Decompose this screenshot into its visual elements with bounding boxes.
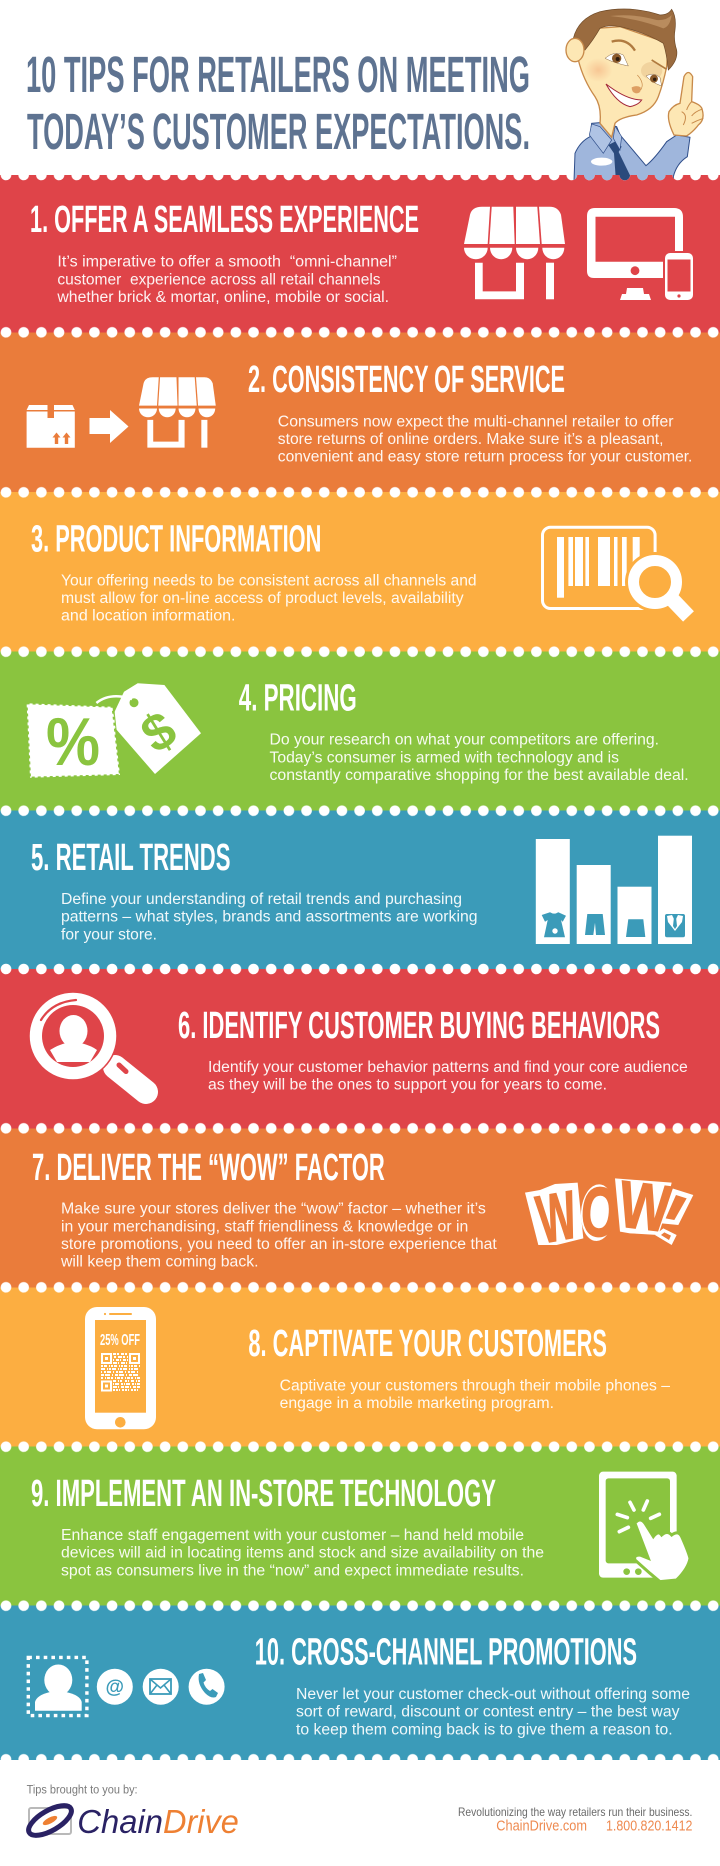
panel: tip 10 <box>0 1606 720 1760</box>
icon: tablet with tapping hand <box>599 1472 690 1582</box>
body 8: Captivate your customers through their mobile phones – <box>280 1377 671 1394</box>
body 2: Consumers now expect the multi-channel retailer to offer <box>278 413 674 430</box>
panel: tip 4 <box>0 652 720 810</box>
QR code <box>101 1354 140 1390</box>
body 1 <box>56 254 397 306</box>
coupon text: 25% OFF <box>100 1332 140 1349</box>
body 2: store returns of online orders. Make sure it’s a pleasant, <box>278 431 664 448</box>
footer <box>24 1782 692 1841</box>
body 4: Do your research on what your competitors are offering. <box>270 732 659 749</box>
icon: dress <box>542 912 566 937</box>
icon: shorts <box>585 914 605 935</box>
body 8 <box>280 1377 671 1412</box>
icon: price tag <box>96 683 201 774</box>
icon: envelope <box>143 1669 179 1705</box>
icon: storefront <box>139 377 216 448</box>
hair <box>573 9 677 70</box>
body 6: as they will be the ones to support you for years to come. <box>208 1077 607 1094</box>
icon: storefront <box>464 207 565 299</box>
body 5: Define your understanding of retail trends and purchasing <box>61 891 462 908</box>
panel: tip 7 <box>0 1128 720 1288</box>
collar <box>589 124 622 153</box>
icon: email at <box>97 1669 133 1705</box>
heading 7: 7. DELIVER THE “WOW” FACTOR <box>32 1147 385 1189</box>
icon: WOW burst: W <box>531 1176 583 1258</box>
credit line: Tips brought to you by: <box>27 1782 138 1796</box>
body 9: Enhance staff engagement with your customer – hand held mobile <box>61 1527 524 1544</box>
icon: monitor and phone <box>587 208 695 302</box>
eyes <box>605 53 628 66</box>
body 4: Today’s consumer is armed with technology and is <box>270 749 619 766</box>
icon: WOW burst: O <box>578 1172 621 1252</box>
website: ChainDrive.com <box>496 1819 587 1835</box>
icon: WOW burst: W <box>615 1166 675 1246</box>
panel: tip 8 <box>0 1288 720 1446</box>
body 2 <box>278 413 692 466</box>
body 10 <box>296 1686 690 1738</box>
logo: ChainDrive: Chain <box>77 1803 163 1840</box>
panel: tip 6 <box>0 969 720 1129</box>
body 4: constantly comparative shopping for the best available deal. <box>270 767 689 784</box>
heading 4: 4. PRICING <box>239 678 357 720</box>
body 9: devices will aid in locating items and stock and size availability on the <box>61 1545 544 1562</box>
logo: ChainDrive <box>24 1800 239 1841</box>
tie <box>608 142 631 182</box>
body 10: sort of reward, discount or contest entry – the best way <box>296 1704 680 1721</box>
nose <box>632 86 641 93</box>
body 1: customer experience across all retail channels <box>57 271 381 288</box>
panel: tip 3 <box>0 492 720 652</box>
icon: email at: @ <box>106 1677 124 1698</box>
icon: magnifier with person <box>29 992 146 1092</box>
ear <box>566 38 584 62</box>
phone number: 1.800.820.1412 <box>606 1819 692 1835</box>
body 10: Never let your customer check-out without offering some <box>296 1686 690 1703</box>
shirt <box>574 123 690 182</box>
hand <box>668 72 703 136</box>
heading 5: 5. RETAIL TRENDS <box>31 837 230 879</box>
icon: parcel box <box>27 405 75 448</box>
body 3: must allow for on-line access of product levels, availability <box>61 590 464 607</box>
body 1: whether brick & mortar, online, mobile or social. <box>56 289 389 306</box>
body 7: in your merchandising, staff friendliness & knowledge or in <box>61 1218 468 1235</box>
exclamation mark <box>661 1195 687 1240</box>
body 3 <box>61 572 477 625</box>
body 3: Your offering needs to be consistent across all channels and <box>61 572 477 589</box>
body 5 <box>61 891 478 943</box>
logo mark <box>24 1800 76 1841</box>
body 5: for your store. <box>61 926 157 943</box>
bar chart: clothing trends <box>536 836 692 944</box>
body 2: convenient and easy store return process for your customer. <box>278 449 692 466</box>
heading 1: 1. OFFER A SEAMLESS EXPERIENCE <box>30 199 419 241</box>
icon: skirt <box>626 919 645 937</box>
body 5: patterns – what styles, brands and assortments are working <box>61 909 478 926</box>
icon: percent stamp: % <box>46 704 100 780</box>
icon: phone with QR coupon <box>85 1307 156 1429</box>
icon: suit <box>665 914 685 937</box>
icon: percent stamp <box>27 703 121 780</box>
panel: tip 5 <box>0 810 720 970</box>
icon: barcode and magnifier <box>542 527 688 616</box>
body 10: to keep them coming back is to give them a reason to. <box>296 1721 673 1738</box>
icon: WOW burst <box>525 1166 693 1258</box>
body 8: engage in a mobile marketing program. <box>280 1395 554 1412</box>
eyebrows <box>612 41 635 51</box>
body 7 <box>60 1201 498 1271</box>
body 7: Make sure your stores deliver the “wow” factor – whether it’s <box>61 1201 486 1218</box>
panel: tip 9 <box>0 1446 720 1606</box>
icon: telephone <box>189 1669 225 1705</box>
heading 3: 3. PRODUCT INFORMATION <box>31 518 321 560</box>
name tag <box>591 158 612 166</box>
body 7: store promotions, you need to offer an in-store experience that <box>61 1236 498 1253</box>
icon: price tag: $ <box>131 700 187 765</box>
body 1: It’s imperative to offer a smooth “omni-channel” <box>57 254 397 271</box>
body 4 <box>270 732 689 784</box>
body 6: Identify your customer behavior patterns and find your core audience <box>208 1059 688 1076</box>
body 9: spot as consumers live in the “now” and expect immediate results. <box>61 1562 524 1579</box>
body 3: and location information. <box>61 608 236 625</box>
body 9 <box>61 1527 544 1579</box>
body 7: will keep them coming back. <box>60 1254 258 1271</box>
title <box>26 46 530 160</box>
face <box>578 27 668 137</box>
mouth <box>606 84 642 107</box>
body 6 <box>208 1059 688 1094</box>
logo: ChainDrive: Drive <box>163 1803 239 1840</box>
icon: arrow <box>90 410 128 443</box>
panel: tip 2 <box>0 332 720 492</box>
icon: dashed person portrait <box>28 1657 87 1716</box>
icon: cartoon salesman character <box>566 9 703 182</box>
panel: tip 1 <box>0 175 720 333</box>
